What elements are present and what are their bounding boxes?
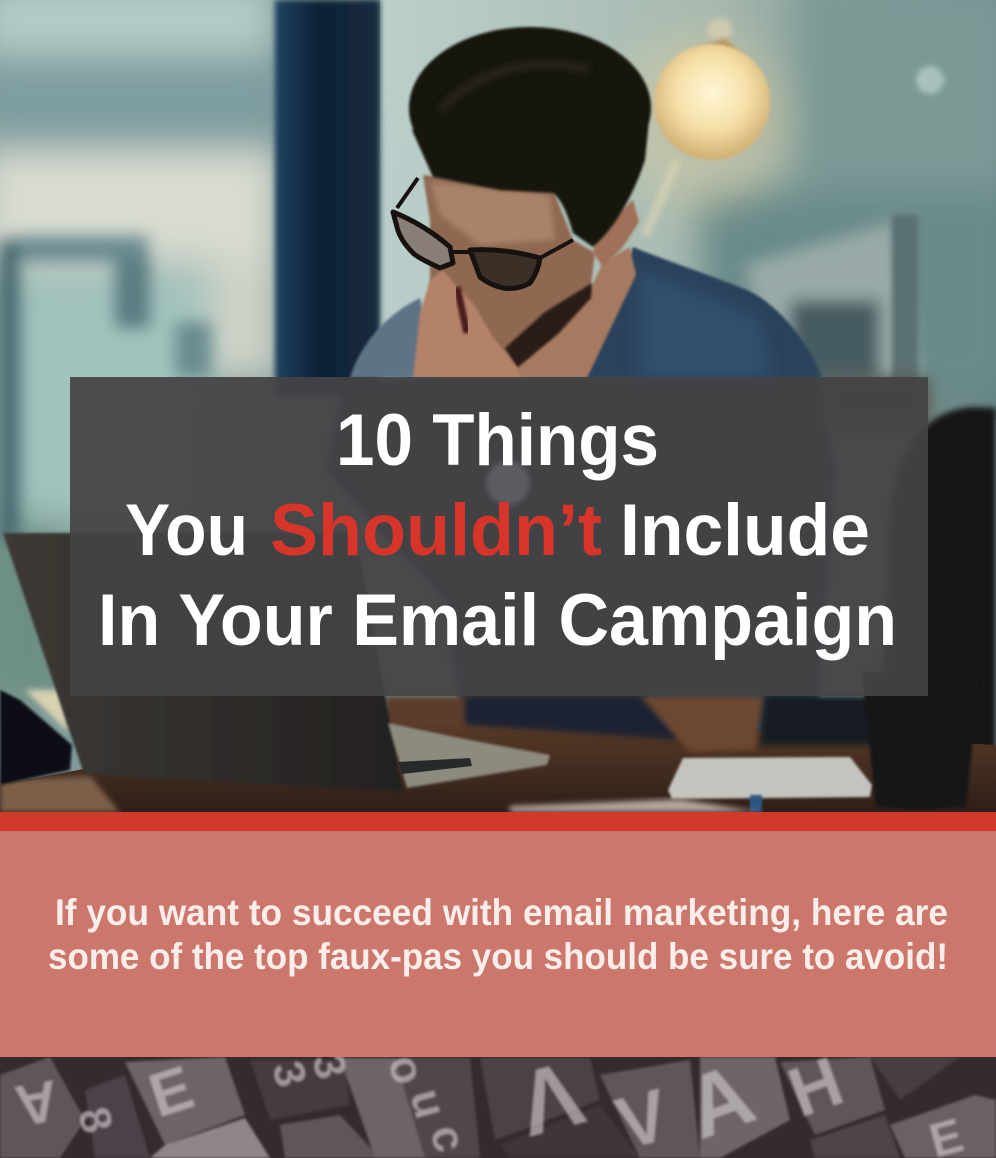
intro panel: [0, 831, 996, 1057]
title text: 10 Things: [336, 400, 659, 481]
man: [325, 27, 835, 752]
red divider: [0, 812, 996, 831]
title text: You: [125, 490, 248, 571]
intro text: If you want to succeed with email marketing, here are: [55, 892, 948, 933]
torso under banner: [380, 376, 822, 732]
metal type letters: V: [508, 1041, 593, 1155]
metal type letters: o: [378, 1049, 436, 1090]
title text: [98, 400, 897, 661]
title text: In Your Email Campaign: [98, 580, 897, 661]
title text: Shouldn’t: [270, 490, 602, 571]
metal type letters: A: [673, 1043, 766, 1158]
metal type letters: A: [10, 1067, 63, 1138]
intro text: [48, 892, 948, 977]
laptop: [3, 533, 550, 792]
left shoulder: [349, 297, 422, 377]
notebook: [668, 757, 872, 799]
hair: [409, 27, 651, 247]
metal type letters: [14, 1057, 965, 1158]
metal type letters: H: [778, 1042, 853, 1132]
letterpress type strip: [0, 1057, 996, 1158]
right shoulder shirt: [585, 247, 822, 378]
metal type letters: E: [141, 1053, 202, 1131]
hand: [413, 270, 522, 378]
coffee cup: [862, 672, 980, 809]
beard: [505, 283, 592, 368]
metal type letters: 3: [302, 1048, 356, 1084]
metal type letters: 8: [68, 1102, 122, 1138]
title banner: [70, 377, 928, 696]
ear: [593, 200, 639, 267]
face: [423, 175, 595, 378]
glasses: [393, 178, 573, 288]
desk and objects: [0, 712, 996, 812]
neck: [517, 246, 638, 377]
intro text: some of the top faux-pas you should be sure to avoid!: [48, 936, 948, 977]
metal type letters: 3: [262, 1056, 316, 1092]
desk lamp: [610, 18, 790, 236]
photo: stressed man at a desk: [0, 0, 996, 812]
metal type letters: u: [400, 1083, 458, 1124]
title text: Include: [620, 490, 870, 571]
metal type letters: c: [420, 1119, 477, 1157]
